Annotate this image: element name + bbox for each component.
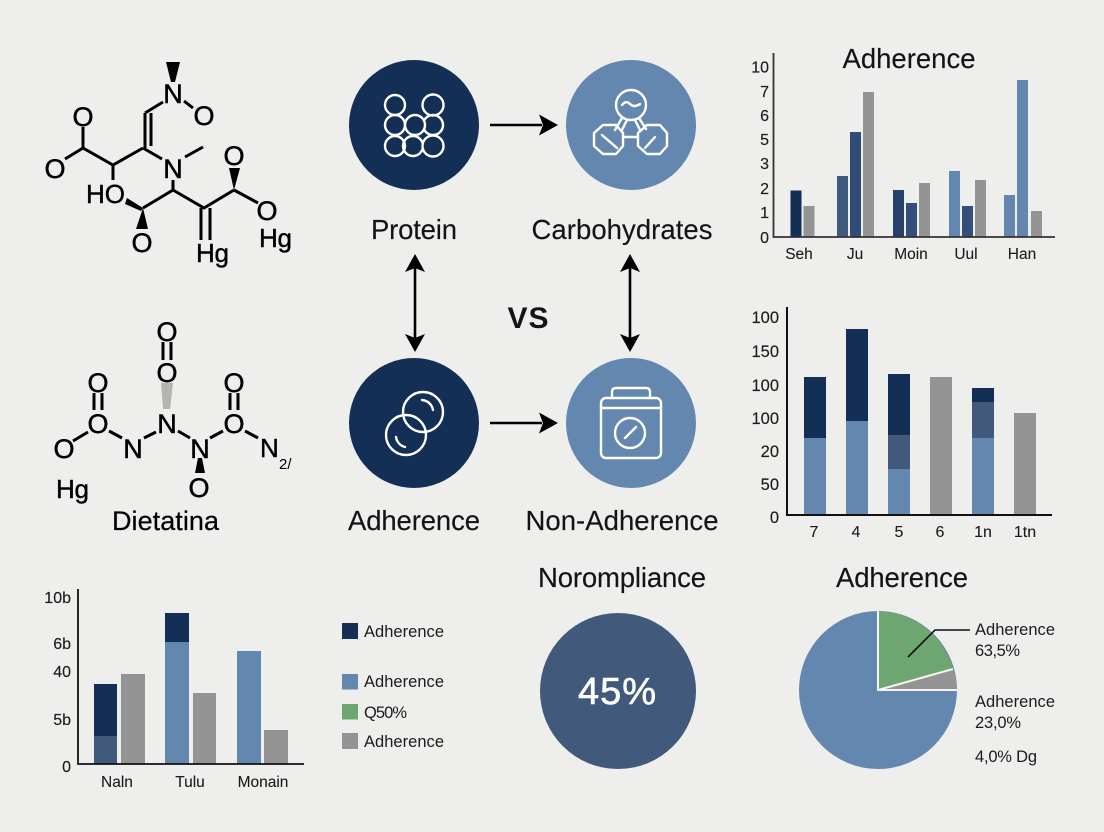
molecule: Dietatina structure: O <box>156 317 178 347</box>
label: Carbohydrates: Carbohydrates <box>532 214 712 245</box>
stacked bars <box>804 329 1036 515</box>
molecule: Dietatina structure: O <box>156 358 178 388</box>
molecule: Dietatina structure: Hg <box>56 474 89 504</box>
pie labels: 63,5% <box>975 642 1020 660</box>
y axis labels: 2 <box>760 181 769 198</box>
x axis labels: Moin <box>894 246 928 263</box>
x axis labels: Seh <box>785 246 813 263</box>
x axis labels <box>785 246 1036 263</box>
y axis labels: 10 <box>751 60 769 76</box>
legend: Adherence <box>364 623 444 641</box>
arrow: Protein to Adherence <box>405 254 425 352</box>
leader line <box>908 630 970 657</box>
chart: bottom left bars <box>44 589 304 791</box>
molecule: Dietatina structure: 2/ <box>279 456 292 473</box>
y axis labels: 5 <box>760 132 769 149</box>
molecule: Dietatina structure: O <box>87 368 109 398</box>
molecule: top structure: O <box>256 196 278 226</box>
molecule: Dietatina structure: O <box>223 368 245 398</box>
molecule: top structure: O <box>223 141 245 171</box>
molecule: Dietatina structure: N <box>123 434 143 464</box>
donut stat: 45%: 45% <box>578 671 656 713</box>
node: Protein <box>349 60 479 190</box>
node: Carbohydrates <box>566 60 696 190</box>
node: Non-Adherence <box>566 358 696 488</box>
molecule: top structure: N <box>163 79 183 109</box>
chart: middle right stacked bars <box>751 307 1052 541</box>
x axis labels <box>101 774 288 791</box>
molecule: Dietatina structure: O <box>223 409 245 439</box>
molecule name: Dietatina <box>112 506 220 536</box>
y axis labels: 7 <box>760 84 769 101</box>
label: Non-Adherence: Non-Adherence <box>526 505 718 536</box>
molecule: Dietatina structure: N <box>157 409 177 439</box>
molecule: top structure: O <box>44 154 66 184</box>
heading: pie chart: Adherence <box>836 562 968 593</box>
y axis labels: 10b <box>44 590 71 607</box>
y axis labels: 6b <box>53 636 71 653</box>
x axis labels <box>810 524 1036 541</box>
x axis labels: Naln <box>101 774 133 791</box>
donut stat: 45% <box>540 613 696 769</box>
arrow: Adherence to Non-Adherence <box>490 412 558 434</box>
x axis labels: Han <box>1008 246 1036 263</box>
molecule: top structure: O <box>72 102 94 132</box>
y axis labels <box>751 309 779 527</box>
bars <box>790 80 1042 236</box>
x axis labels: Uul <box>954 246 978 263</box>
pie labels: 23,0% <box>975 714 1021 732</box>
molecule: top structure: O <box>131 228 153 258</box>
y axis labels <box>44 590 71 776</box>
y axis labels: 20 <box>761 443 779 461</box>
molecule: top structure: N <box>163 154 183 184</box>
x axis labels: 5 <box>895 524 904 541</box>
x axis labels: Ju <box>847 246 863 263</box>
x axis labels: Tulu <box>175 774 205 791</box>
chart: top grouped bars <box>751 43 1055 263</box>
y axis labels: 0 <box>770 509 779 527</box>
x axis labels: 1n <box>974 524 992 541</box>
pie labels <box>975 621 1055 766</box>
legend: Adherence <box>364 733 444 751</box>
molecule: Dietatina structure: O <box>53 434 75 464</box>
y axis labels: 50 <box>761 476 779 494</box>
icon: carbohydrate molecule <box>594 90 667 154</box>
pie chart <box>799 611 970 769</box>
bars <box>94 613 288 764</box>
y axis labels: 5b <box>53 712 71 729</box>
icon: pill bottle <box>601 388 661 458</box>
molecule: top structure: HO <box>86 179 125 209</box>
y axis labels: 0 <box>760 230 769 247</box>
molecule: Dietatina structure: O <box>87 409 109 439</box>
y axis labels: 100 <box>751 309 779 327</box>
y axis labels: 100 <box>751 410 779 428</box>
pie labels: Adherence <box>975 621 1055 639</box>
y axis labels <box>751 60 769 247</box>
label: Adherence: Adherence <box>348 505 480 536</box>
molecule: top structure: O <box>193 101 215 131</box>
chart title: Adherence <box>842 43 976 74</box>
heading: Norompliance: Norompliance <box>538 562 706 593</box>
molecule: Dietatina structure: N <box>190 434 210 464</box>
molecule: top structure: Hg <box>196 238 229 268</box>
legend: Q50% <box>364 704 407 722</box>
y axis labels: 1 <box>760 205 769 222</box>
molecule: Dietatina structure: O <box>188 473 210 503</box>
x axis labels: Monain <box>238 774 288 791</box>
molecule: Dietatina structure <box>53 317 292 536</box>
legend: Adherence <box>364 673 444 691</box>
y axis labels: 100 <box>751 377 779 395</box>
node: Adherence <box>349 358 479 488</box>
y axis labels: 3 <box>760 156 769 173</box>
x axis labels: 1tn <box>1014 524 1036 541</box>
molecule: top structure <box>44 62 292 268</box>
x axis labels: 6 <box>936 524 945 541</box>
molecule: top structure: Hg <box>259 223 292 253</box>
arrow: Protein to Carbohydrates <box>490 114 558 136</box>
x axis labels: 7 <box>810 524 819 541</box>
label: VS: VS <box>508 302 548 335</box>
y axis labels: 6 <box>760 108 769 125</box>
molecule: Dietatina structure: N <box>260 433 279 463</box>
y axis labels: 40 <box>53 664 71 681</box>
icon: protein chain <box>385 94 444 156</box>
label: Protein: Protein <box>371 214 457 245</box>
pie labels: 4,0% Dg <box>975 748 1037 766</box>
legend <box>342 623 444 751</box>
y axis labels: 150 <box>751 343 779 361</box>
icon: two overlapping capsules <box>386 392 443 455</box>
x axis labels: 4 <box>852 524 861 541</box>
y axis labels: 0 <box>62 759 71 776</box>
arrow: Carbohydrates to Non-Adherence <box>620 254 640 352</box>
pie labels: Adherence <box>975 693 1055 711</box>
